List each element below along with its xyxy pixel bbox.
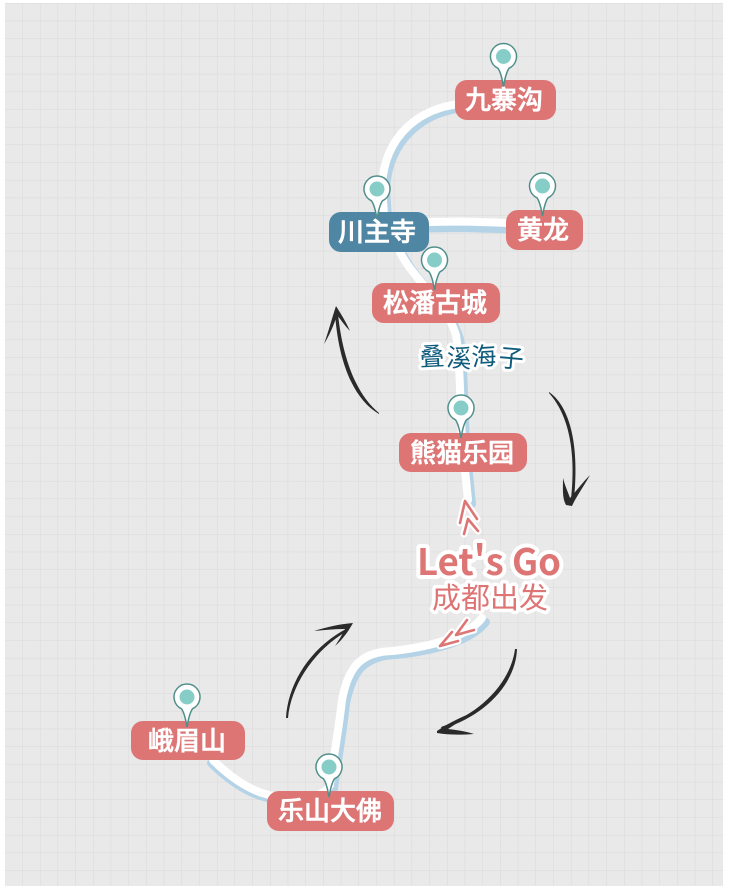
label: Huanglong: 黄龙 bbox=[517, 210, 569, 247]
heading: Let's Go: Let's Go bbox=[417, 533, 561, 586]
label: Panda park: 熊猫乐园 bbox=[410, 433, 514, 470]
icon: pin Jiuzhaigou bbox=[490, 44, 516, 86]
icon: pin Leshan bbox=[316, 754, 342, 797]
icon: upward chevrons bbox=[460, 501, 478, 534]
icon: pin Panda park bbox=[448, 395, 474, 438]
arrow: hand-drawn toward Chengdu right bbox=[549, 392, 590, 506]
label: Chuanzhusi: 川主寺 bbox=[338, 212, 416, 249]
icon: pin Huanglong bbox=[530, 173, 556, 216]
label: Songpan ancient town: 松潘古城 bbox=[383, 283, 487, 320]
label: Emeishan: 峨眉山 bbox=[148, 721, 226, 758]
label: Leshan Giant Buddha: 乐山大佛 bbox=[278, 791, 382, 828]
arrow: hand-drawn toward southwest bbox=[437, 649, 517, 735]
label: Diexi Lake handwritten: 叠溪海子 bbox=[419, 336, 526, 376]
arrow: hand-drawn toward northeast bbox=[286, 623, 353, 718]
icon: pin Emeishan bbox=[174, 684, 200, 727]
label: Emeishan bbox=[131, 721, 245, 760]
route line bbox=[211, 104, 510, 802]
label: Jiuzhaigou: 九寨沟 bbox=[465, 80, 543, 117]
subheading: depart from Chengdu: 成都出发 bbox=[432, 575, 548, 617]
arrow: hand-drawn toward Songpan bbox=[324, 306, 379, 414]
icon: downward chevrons bbox=[440, 620, 474, 646]
label: Huanglong bbox=[506, 210, 583, 250]
icon: pin Songpan bbox=[422, 247, 448, 290]
icon: pin Chuanzhusi bbox=[364, 176, 390, 219]
